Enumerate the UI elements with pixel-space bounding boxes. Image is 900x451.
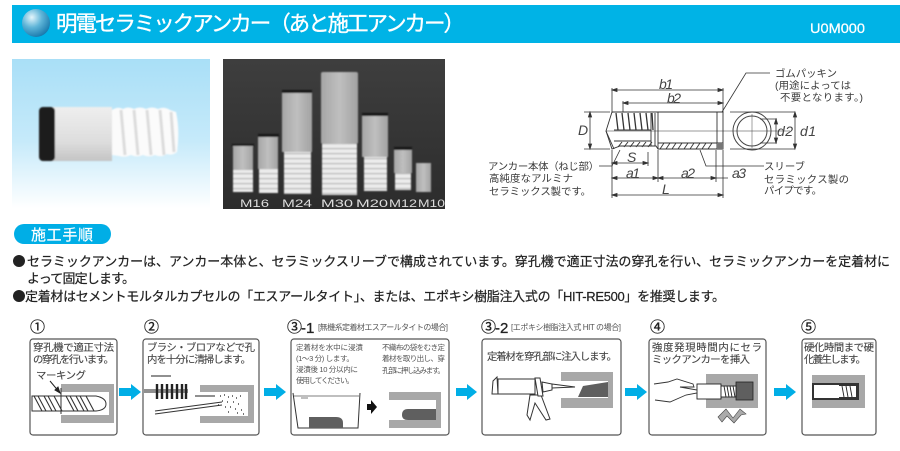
anchor M24	[282, 90, 312, 194]
size labels: M24	[282, 198, 312, 210]
anchor M10	[416, 163, 431, 192]
step 2	[143, 319, 259, 435]
size labels: M10	[418, 198, 445, 210]
threaded body	[112, 108, 178, 157]
callout: anchor body: アンカー本体（ねじ部）	[488, 160, 599, 173]
step 3-2: 定着材を穿孔部に注入します。	[487, 350, 617, 363]
step 3-1: -1	[301, 320, 314, 337]
title: 明電セラミックアンカー（あと施工アンカー）	[56, 12, 465, 36]
dimension labels: D	[578, 122, 588, 138]
arrow 1	[119, 384, 141, 400]
callout: anchor body: 高純度なアルミナ	[489, 172, 573, 185]
anchor M16 second	[258, 134, 279, 193]
description text: よって固定します。	[27, 271, 135, 286]
dimension labels: b1	[659, 76, 673, 92]
arrow 4	[625, 384, 647, 400]
step 1: マーキング	[36, 369, 86, 382]
anchor M12	[394, 147, 412, 190]
size labels: M12	[389, 198, 417, 210]
anchor body drawing	[606, 112, 790, 149]
arrow 2	[264, 384, 286, 400]
marking arrow	[50, 381, 60, 393]
step 4: 強度発現時間内にセラ	[652, 341, 762, 354]
step 3-1	[287, 319, 449, 435]
step 3-2	[481, 319, 621, 435]
step 3-2: -2	[495, 320, 508, 337]
size labels: M20	[356, 198, 388, 210]
step 5: ⑤	[801, 319, 816, 336]
step 3-2: ③	[481, 319, 496, 336]
black arrow	[367, 400, 377, 414]
dimension labels: a1	[626, 165, 640, 181]
step 1	[30, 319, 117, 435]
step 1: ①	[30, 319, 45, 336]
brush	[144, 376, 215, 399]
left instruction: 使用してください。	[296, 375, 354, 385]
left instruction: 浸漬後 10 分以内に	[296, 364, 358, 374]
description text	[13, 254, 890, 304]
end view ring	[733, 112, 771, 150]
dimension labels: d1	[800, 123, 816, 139]
callout: anchor body: セラミックス製です。	[489, 185, 591, 198]
size labels: M16	[240, 198, 269, 210]
right instruction	[382, 342, 445, 375]
callout: rubber packing: (用途によっては	[775, 80, 851, 92]
step 4: ④	[650, 319, 665, 336]
callout: rubber packing	[775, 67, 863, 104]
left instruction: (1～3 分) します。	[296, 354, 354, 363]
sleeve	[52, 107, 112, 161]
callout: rubber packing: ゴムパッキン	[775, 67, 837, 80]
blower	[155, 402, 222, 414]
section heading pill: 施工手順	[31, 227, 93, 244]
anchor M20	[362, 113, 388, 191]
step 4	[649, 319, 766, 435]
right instruction: 不織布の袋をむき定	[382, 342, 445, 352]
dimension labels: d2	[777, 123, 793, 139]
step 5	[801, 319, 876, 435]
left instruction: 定着材を水中に浸漬	[296, 342, 363, 352]
capsule in hole	[389, 392, 441, 428]
size labels	[240, 198, 445, 210]
callout: sleeve: セラミックス製の	[764, 173, 849, 186]
title banner	[12, 5, 900, 43]
anchor	[697, 384, 736, 399]
dimension diagram	[488, 67, 863, 198]
step 2: ブラシ・ブロアなどで孔	[147, 341, 256, 354]
dimension labels: L	[662, 181, 670, 197]
dimension labels: a3	[732, 165, 746, 181]
step 1: の穿孔を行います。	[33, 353, 114, 366]
callout: anchor body	[488, 160, 599, 198]
callout: rubber packing: 不要となります。)	[780, 92, 863, 104]
right instruction: 着材を取り出し、穿	[382, 353, 445, 363]
dust	[218, 395, 244, 414]
right instruction: 孔部に押し込みます。	[382, 365, 445, 375]
hole in concrete	[61, 384, 114, 423]
rubber cap	[39, 107, 55, 161]
injected resin	[578, 382, 608, 397]
step 2: ②	[144, 319, 159, 336]
callout: sleeve	[764, 160, 849, 197]
dimension labels: S	[627, 149, 637, 165]
turning arrow	[718, 409, 746, 423]
dimension labels	[578, 76, 816, 197]
section heading pill	[14, 224, 111, 244]
photo: single ceramic anchor	[12, 59, 210, 208]
arrow 5	[774, 384, 796, 400]
dimension labels: a2	[681, 165, 695, 181]
icon: blue sphere	[22, 9, 50, 37]
hole	[200, 385, 254, 423]
hole with resin	[706, 374, 758, 408]
step 2: 内を十分に清掃します。	[147, 353, 251, 366]
step 5: 硬化時間まで硬	[804, 342, 875, 354]
step 3-1: [無機系定着材エスアールタイトの場合]	[318, 322, 448, 332]
callout: sleeve: スリーブ	[764, 160, 806, 173]
anchor M16	[232, 144, 254, 192]
step 4: ミックアンカーを挿入	[652, 353, 751, 366]
anchor M30	[321, 72, 358, 195]
product code: U0M000	[810, 20, 865, 36]
water bucket	[293, 393, 360, 428]
caulking gun	[492, 377, 575, 420]
dimension lines	[584, 73, 797, 198]
drill	[32, 396, 106, 411]
left instruction	[296, 342, 363, 385]
photo: anchor size range	[223, 59, 445, 210]
hand	[654, 379, 697, 402]
step 1: 穿孔機で適正寸法	[33, 341, 115, 354]
dimension labels: b2	[667, 90, 681, 106]
hole	[561, 372, 613, 408]
description text: セラミックアンカーは、アンカー本体と、セラミックスリーブで構成されています。穿孔機で適正寸法の穿孔を行い、セラミックアンカーを定着材に	[27, 254, 890, 269]
description text: 定着材はセメントモルタルカプセルの「エスアールタイト」、または、エポキシ樹脂注入式の「HIT-RE500」を推奨します。	[25, 289, 725, 304]
cured anchor	[812, 375, 865, 408]
step 5: 化養生します。	[804, 353, 866, 366]
callout: sleeve: パイプです。	[764, 185, 822, 197]
size labels: M30	[321, 198, 353, 210]
step 3-1: ③	[287, 319, 302, 336]
step 3-2: [エポキシ樹脂注入式 HIT の場合]	[511, 322, 621, 332]
arrow 3	[456, 384, 477, 400]
